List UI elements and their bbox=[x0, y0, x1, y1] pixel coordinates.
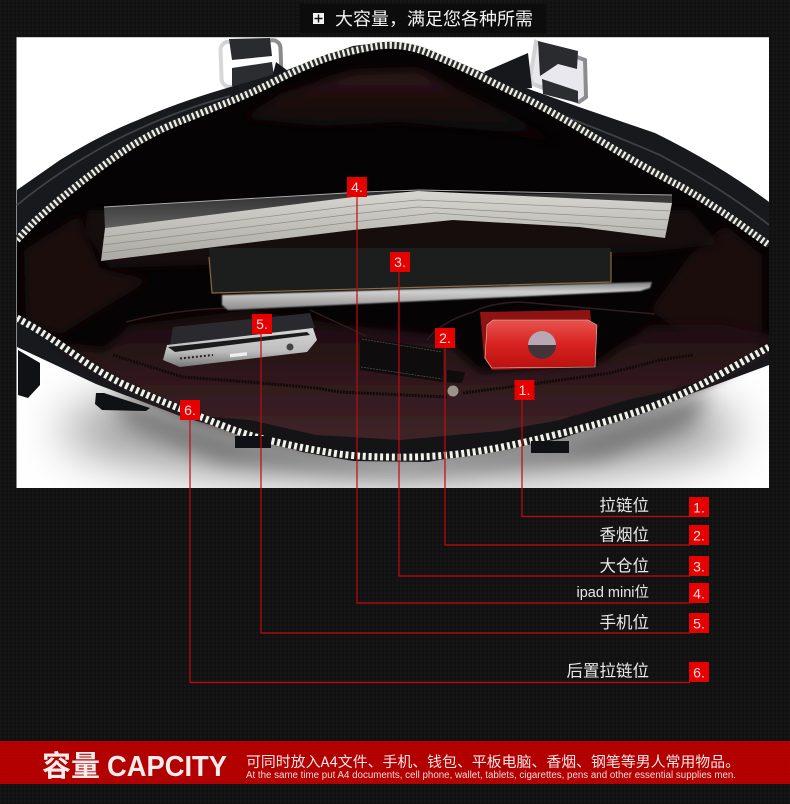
bag outer shell bbox=[17, 44, 769, 462]
legend item 4: 4. bbox=[693, 586, 705, 602]
marker 3 on photo bbox=[390, 252, 410, 272]
marker 2 on photo: 2. bbox=[439, 330, 451, 346]
banner capacity word: CAPCITY bbox=[107, 751, 227, 783]
legend item 4: ipad mini位 bbox=[576, 584, 649, 601]
phone bbox=[163, 313, 317, 367]
dark band above bottom zipper bbox=[211, 382, 698, 454]
legend item 3: 大仓位 bbox=[600, 556, 649, 576]
ground shadow wide bbox=[60, 378, 740, 482]
lower lining bbox=[55, 310, 772, 455]
legend item 4 bbox=[576, 583, 709, 603]
marker 6 on photo: 6. bbox=[184, 402, 196, 418]
legend item 1: 1. bbox=[693, 500, 705, 516]
capacity banner bbox=[0, 741, 790, 785]
bag interior lining bbox=[17, 48, 769, 374]
legend item 6 bbox=[566, 662, 709, 682]
legend item 2: 香烟位 bbox=[600, 526, 649, 544]
legend item 5: 手机位 bbox=[600, 613, 649, 632]
icon: right handle bbox=[484, 41, 586, 103]
icon: left handle bbox=[218, 38, 287, 88]
upper lining bbox=[251, 66, 529, 132]
legend item 1: 拉链位 bbox=[600, 496, 649, 515]
side linings bbox=[16, 218, 762, 334]
leader lines bbox=[190, 196, 690, 682]
shell highlight seams bbox=[17, 92, 769, 225]
ground shadow close bbox=[110, 392, 710, 474]
icon: plus square bbox=[313, 13, 324, 24]
legend item 6: 后置拉链位 bbox=[566, 662, 649, 680]
banner english description: At the same time put A4 documents, cell phone, wallet, tablets, cigarettes, pens and other essential supplies men. bbox=[246, 770, 736, 781]
legend item 2 bbox=[600, 525, 709, 545]
marker 4 on photo: 4. bbox=[351, 179, 363, 195]
legend item 2: 2. bbox=[693, 528, 705, 544]
legend item 5: 5. bbox=[693, 616, 705, 632]
legend item 1 bbox=[600, 496, 709, 517]
marker 5 on photo bbox=[252, 314, 272, 334]
marker 1 on photo bbox=[514, 380, 534, 400]
marker 6 on photo bbox=[180, 400, 200, 420]
legend item 5 bbox=[600, 613, 709, 633]
panel: bag photo bbox=[16, 36, 772, 488]
banner heading: 容量 bbox=[42, 743, 100, 785]
legend item 3 bbox=[600, 556, 709, 576]
tablet bbox=[222, 282, 652, 310]
legend item 3: 3. bbox=[693, 558, 705, 574]
cigarette box bbox=[480, 310, 597, 370]
book bbox=[101, 190, 672, 261]
marker 1 on photo: 1. bbox=[519, 382, 530, 398]
marker 3 on photo: 3. bbox=[394, 254, 406, 270]
marker 4 on photo bbox=[347, 177, 367, 197]
organiser pocket band bbox=[84, 210, 720, 268]
leather tag bbox=[360, 337, 465, 396]
bag feet and side tabs bbox=[18, 350, 569, 453]
marker 2 on photo bbox=[435, 328, 455, 348]
lower zipper bbox=[17, 318, 769, 457]
legend item 6: 6. bbox=[693, 664, 705, 680]
left pocket lip bbox=[126, 308, 366, 336]
title bbox=[300, 4, 546, 33]
banner chinese description: 可同时放入A4文件、手机、钱包、平板电脑、香烟、钢笔等男人常用物品。 bbox=[246, 751, 740, 772]
right pocket lip bbox=[427, 302, 655, 340]
title: 大容量，满足您各种所需 bbox=[335, 6, 533, 31]
black organiser bbox=[209, 248, 611, 293]
marker 5 on photo: 5. bbox=[256, 316, 268, 332]
upper zipper bbox=[17, 45, 769, 245]
interior zipper bbox=[113, 355, 693, 397]
